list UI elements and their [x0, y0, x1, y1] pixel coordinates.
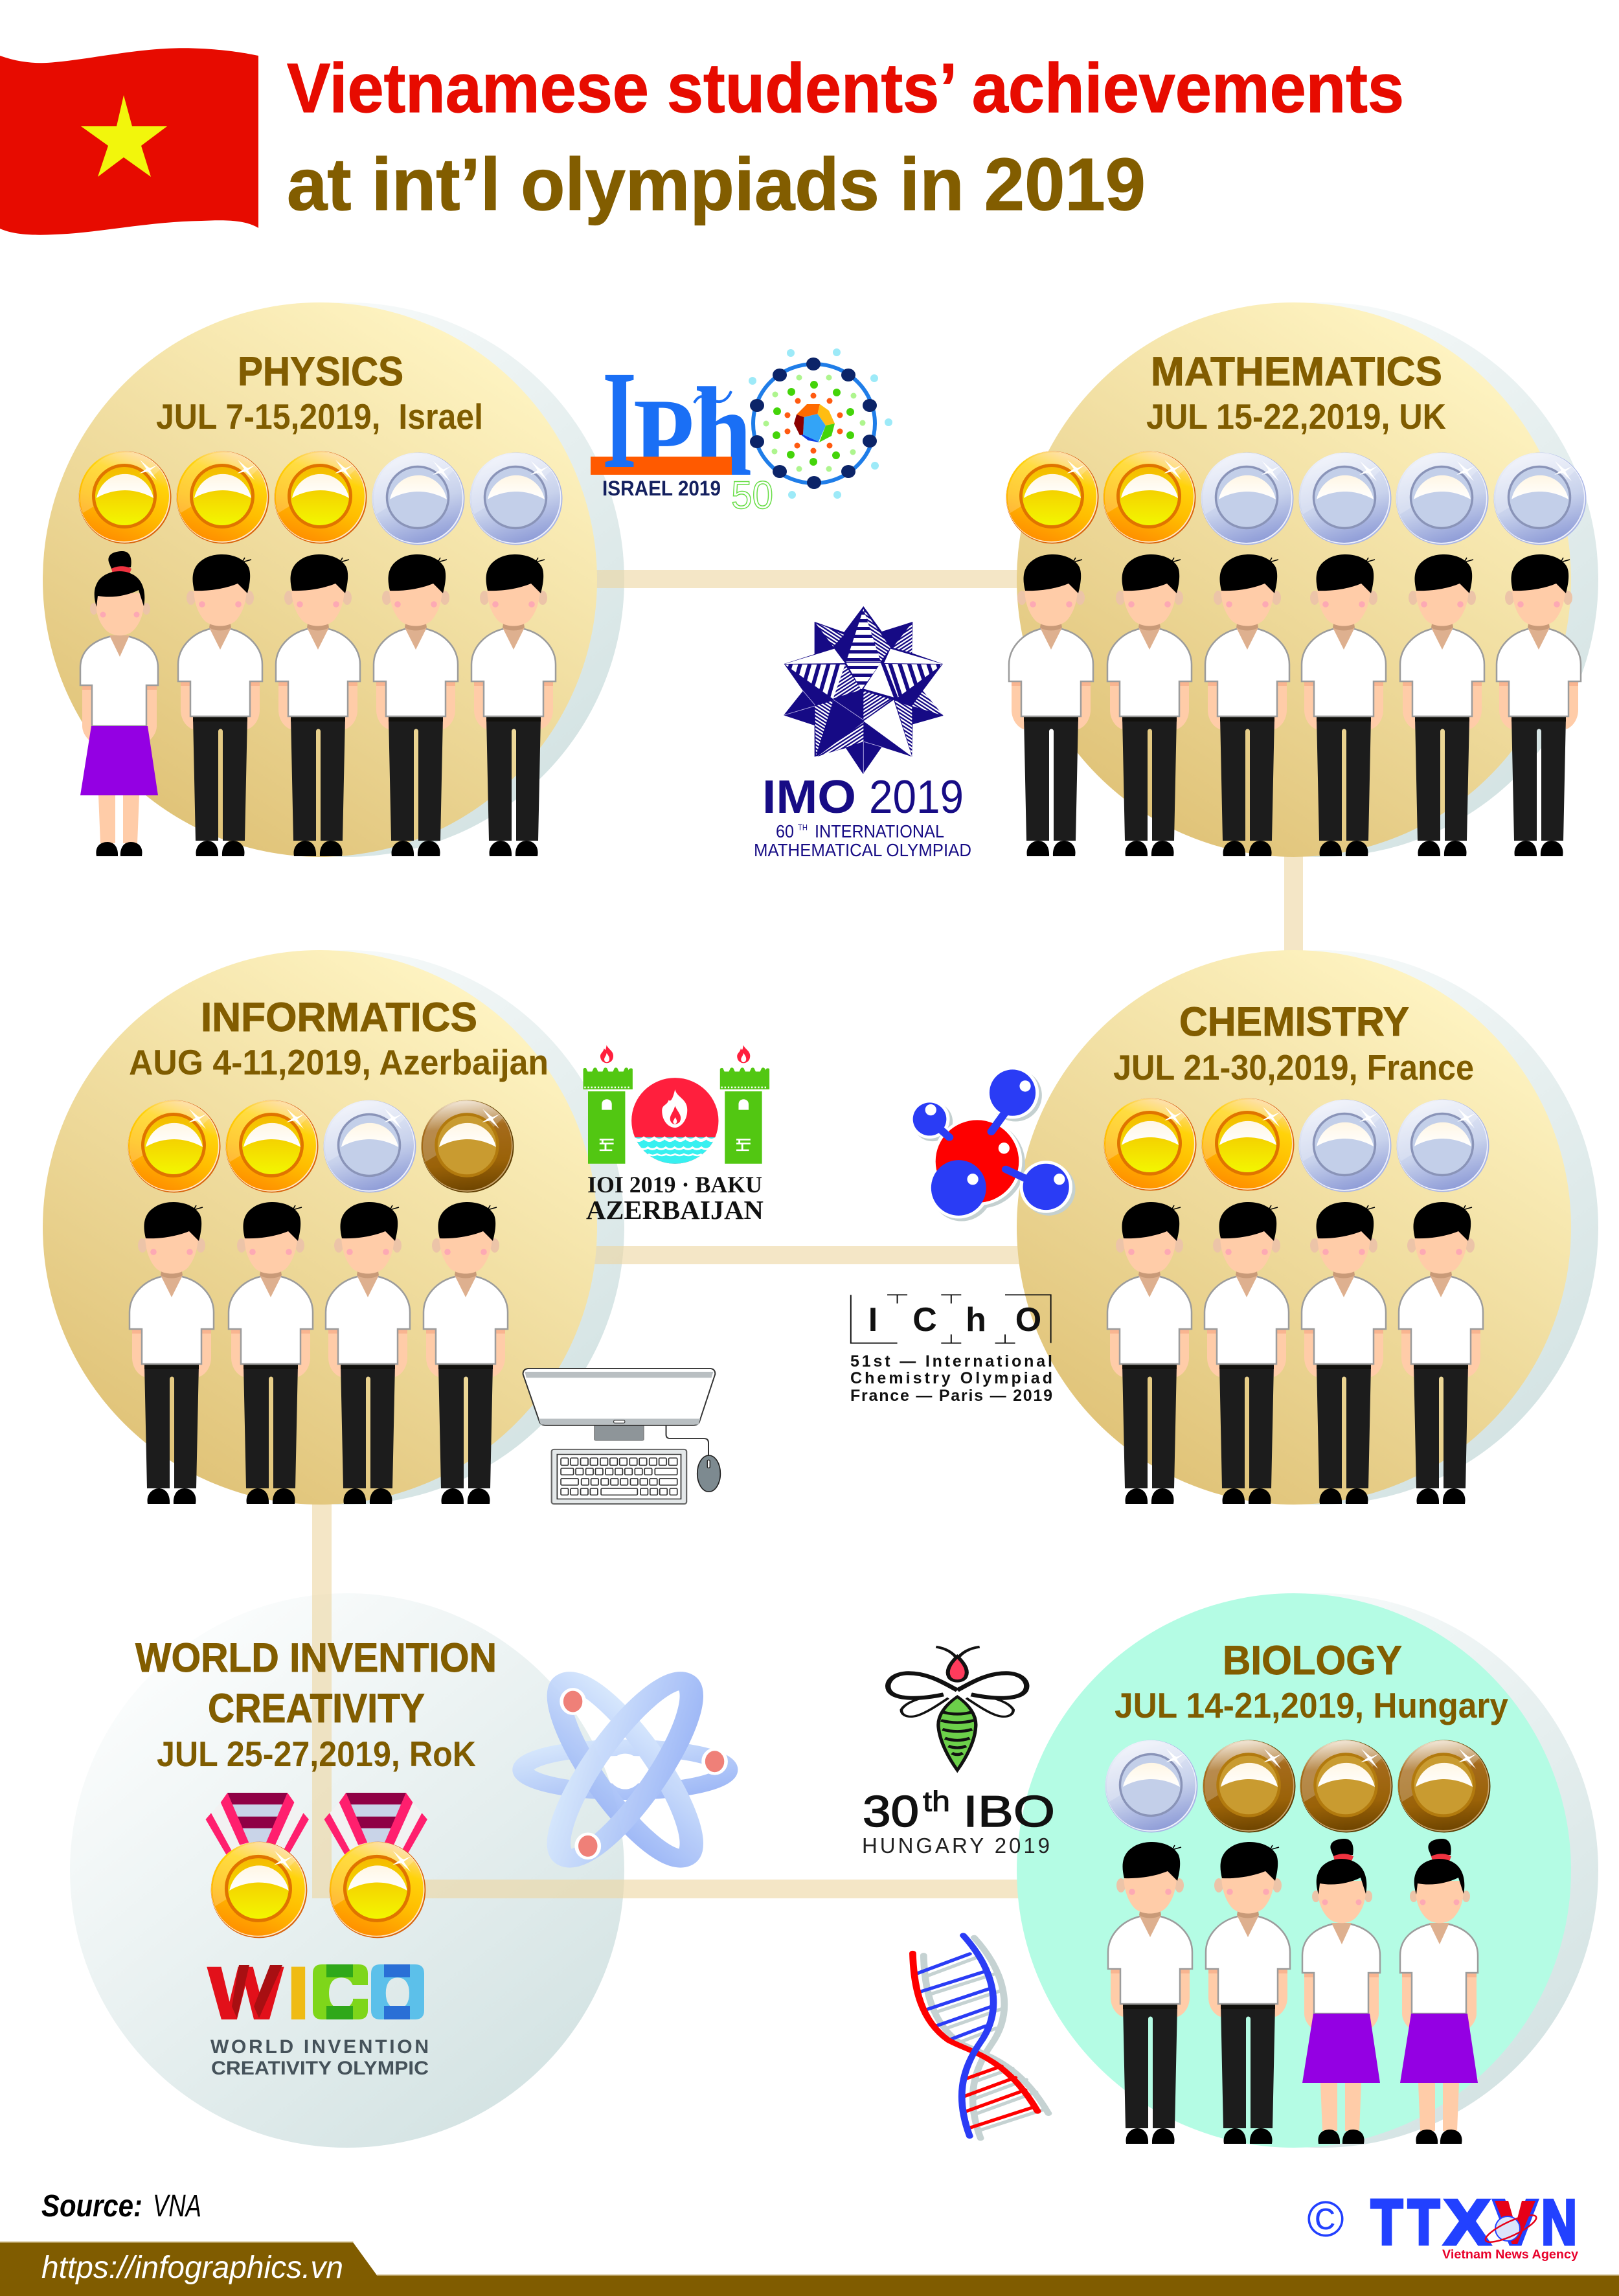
source: Source:: [41, 2189, 142, 2223]
logo: WICO: CREATIVITY OLYMPIC: [211, 2058, 429, 2079]
logo: TTXVN: N: [1541, 2187, 1577, 2258]
logo: IChO: I: [868, 1301, 877, 1339]
logo: IPhO: P: [633, 376, 694, 499]
date: informatics: AUG 4-11,2019, Azerbaijan: [129, 1042, 549, 1082]
flag: [0, 48, 258, 235]
logo: IChO: h: [966, 1301, 986, 1339]
logo: TTXVN: V: [1493, 2187, 1537, 2258]
medal with ribbon 1: [206, 1793, 309, 1938]
medals: informatics: [128, 1100, 514, 1193]
medals: physics: [79, 451, 562, 545]
logo: IChO: C: [912, 1301, 937, 1339]
background circles: [70, 302, 1598, 2148]
panel: mathematics: [1006, 302, 1587, 857]
heading: chemistry: CHEMISTRY: [1179, 999, 1409, 1045]
logo: IMO: [754, 606, 971, 860]
icon: DNA: [912, 1935, 1048, 2139]
icon: molecule: [913, 1069, 1072, 1218]
logo: IPhO: h: [694, 361, 752, 503]
logo: WICO: I: [288, 1953, 309, 2034]
panel: physics: [43, 302, 597, 857]
website url: https://infographics.vn: [41, 2251, 343, 2285]
medals: mathematics: [1006, 451, 1587, 545]
source: VNA: [153, 2189, 201, 2223]
logo: IBO: IBO: [963, 1787, 1055, 1836]
date: biology: JUL 14-21,2019, Hungary: [1115, 1685, 1508, 1725]
date: physics: JUL 7-15,2019, Israel: [156, 396, 483, 437]
students: physics: [80, 551, 556, 856]
panel: biology: [1017, 1593, 1571, 2148]
title: [287, 49, 1404, 226]
connector lines: [312, 570, 1303, 1898]
students: chemistry: [1107, 1202, 1483, 1504]
logo: IMO: INTERNATIONAL: [815, 821, 944, 841]
logo: IChO: O: [1015, 1301, 1041, 1339]
title: Vietnamese students’ achievements: [287, 49, 1404, 127]
logo: TTXVN: Vietnam News Agency: [1442, 2248, 1578, 2262]
logo: IBO: HUNGARY 2019: [862, 1834, 1050, 1858]
logo: IMO: 2019: [869, 771, 964, 823]
medals: biology: [1105, 1740, 1491, 1833]
logo: IBO: th: [923, 1786, 950, 1817]
students: biology: [1108, 1839, 1478, 2144]
logo: IChO: France — Paris — 2019: [850, 1387, 1052, 1405]
logo: IOI: [583, 1045, 769, 1225]
date: chemistry: JUL 21-30,2019, France: [1113, 1047, 1474, 1087]
heading: physics: PHYSICS: [238, 349, 403, 394]
heading: world invention creativity: [135, 1635, 497, 1731]
logo: TTXVN: X: [1444, 2187, 1490, 2258]
logo: WICO: C: [317, 1957, 363, 2030]
heading: world invention creativity: WORLD INVENTION: [135, 1635, 497, 1681]
logo: IMO: MATHEMATICAL OLYMPIAD: [754, 840, 971, 860]
title: at int’l olympiads in 2019: [287, 144, 1146, 226]
logo: IChO: [850, 1295, 1052, 1405]
logo: TTXVN: T: [1371, 2187, 1403, 2258]
logo: IPhO: 50: [731, 473, 773, 517]
logo: TTXVN: [1307, 2187, 1578, 2262]
panel: informatics: [43, 950, 597, 1505]
icon: atom: [523, 1670, 727, 1870]
logo: TTXVN: T: [1408, 2187, 1440, 2258]
date: world invention creativity: JUL 25-27,2019, RoK: [157, 1734, 476, 1774]
heading: informatics: INFORMATICS: [201, 995, 477, 1040]
logo: IPhO: [591, 342, 892, 517]
medal with ribbon 2: [324, 1793, 427, 1938]
heading: world invention creativity: CREATIVITY: [208, 1686, 425, 1731]
logo: IChO: Chemistry Olympiad: [850, 1369, 1052, 1387]
logo: IBO: 30: [863, 1787, 919, 1836]
medals: chemistry: [1104, 1098, 1489, 1192]
logo: IMO: 60: [776, 821, 794, 841]
heading: biology: BIOLOGY: [1223, 1638, 1402, 1683]
logo: IChO: 51st — International: [850, 1352, 1052, 1370]
heading: mathematics: MATHEMATICS: [1151, 349, 1442, 394]
footer band: [0, 2242, 1619, 2296]
logo: WICO: W: [209, 1953, 282, 2034]
logo: IMO: TH: [798, 823, 808, 832]
icon: flag star: [81, 95, 167, 177]
logo: WICO: O: [375, 1957, 420, 2030]
logo: WICO: WORLD INVENTION: [210, 2036, 429, 2058]
logo: IOI: AZERBAIJAN: [586, 1195, 764, 1225]
logo: IBO: [862, 1647, 1055, 1858]
logo: WICO: [209, 1953, 429, 2079]
icon: computer: [523, 1369, 720, 1504]
panel: world invention creativity: [135, 1635, 497, 2079]
logo: IPhO: ISRAEL 2019: [602, 477, 721, 500]
panel: chemistry: [1017, 950, 1571, 1505]
students: mathematics: [1009, 554, 1581, 856]
logo: TTXVN: ©: [1307, 2190, 1344, 2247]
logo: IPhO: I: [602, 342, 637, 497]
students: informatics: [130, 1202, 508, 1504]
logo: IMO: IMO: [762, 771, 856, 823]
logo: IOI: IOI 2019 · BAKU: [587, 1172, 762, 1198]
date: mathematics: JUL 15-22,2019, UK: [1146, 396, 1446, 437]
